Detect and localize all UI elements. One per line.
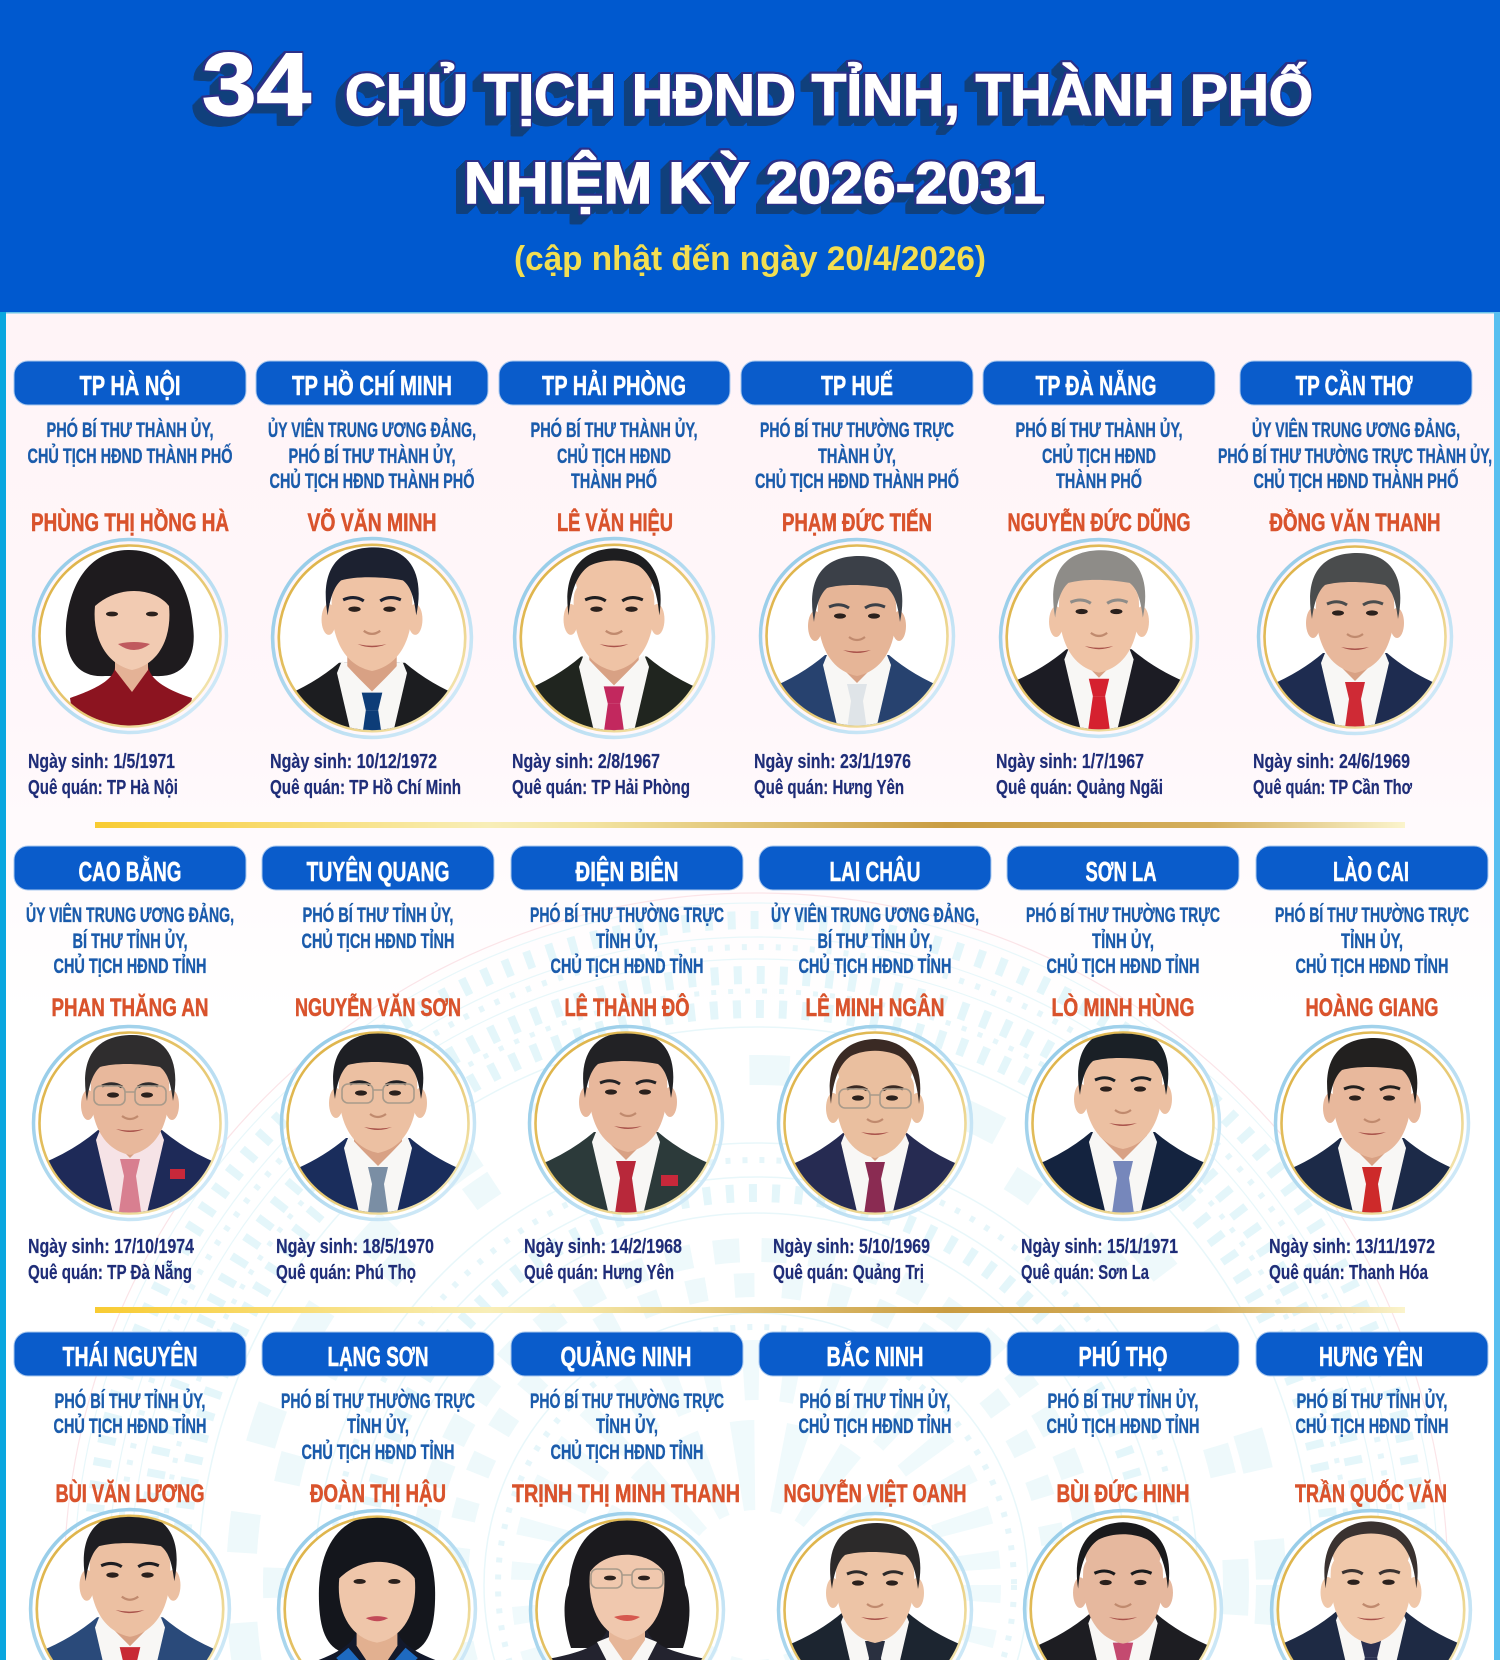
portrait <box>758 538 956 734</box>
name: ĐỒNG VĂN THANH <box>1270 507 1440 537</box>
role: THÀNH ỦY, <box>818 444 896 468</box>
name: VÕ VĂN MINH <box>308 507 436 537</box>
info: Ngày sinh: 2/8/1967 <box>512 751 660 773</box>
info <box>28 1236 195 1284</box>
right border <box>1494 312 1500 1660</box>
role <box>1296 1389 1448 1438</box>
name: HOÀNG GIANG <box>1306 993 1438 1022</box>
role <box>1046 1389 1200 1438</box>
info: Quê quán: Phú Thọ <box>276 1262 416 1284</box>
info <box>1269 1236 1435 1284</box>
card: TP Hồ Chí Minh <box>243 361 501 799</box>
role: CHỦ TỊCH HĐND THÀNH PHỐ <box>755 469 959 493</box>
role: PHÓ BÍ THƯ THÀNH ỦY, <box>530 418 698 442</box>
heading: TP Cần Thơ: TP CẦN THƠ <box>1296 370 1413 401</box>
role: ỦY VIÊN TRUNG ƯƠNG ĐẢNG, <box>268 418 476 442</box>
name: BÙI ĐỨC HINH <box>1056 1478 1190 1508</box>
role: TỈNH ỦY, <box>596 929 658 953</box>
card: Thái Nguyên <box>1 1332 259 1660</box>
info: Quê quán: TP Cần Thơ <box>1253 777 1413 799</box>
role: PHÓ BÍ THƯ THÀNH ỦY, <box>288 444 456 468</box>
name: NGUYỄN VĂN SƠN <box>295 992 461 1022</box>
info: Quê quán: Hưng Yên <box>524 1262 674 1284</box>
heading: Lào Cai: LÀO CAI <box>1333 856 1409 887</box>
divider 1 <box>95 822 1405 828</box>
info <box>276 1236 434 1284</box>
portrait <box>32 1024 228 1222</box>
role: ỦY VIÊN TRUNG ƯƠNG ĐẢNG, <box>26 903 234 927</box>
name: TRỊNH THỊ MINH THANH <box>512 1480 740 1508</box>
portrait <box>279 1511 475 1660</box>
role <box>530 418 698 493</box>
info: Quê quán: TP Đà Nẵng <box>28 1260 192 1284</box>
role <box>771 903 979 978</box>
card: Tuyên Quang <box>253 846 503 1284</box>
heading: TP Hà Nội: TP HÀ NỘI <box>80 369 180 401</box>
title: CHỦ TỊCH HĐND TỈNH, THÀNH PHỐ <box>345 63 1313 128</box>
card: Lạng Sơn <box>262 1332 494 1660</box>
divider 2 <box>95 1307 1405 1313</box>
card: Quảng Ninh <box>511 1332 743 1660</box>
background pattern: bronze drum <box>64 893 1448 1660</box>
card: Lai Châu <box>750 846 1000 1284</box>
role: PHÓ BÍ THƯ TỈNH ỦY, <box>1048 1389 1198 1413</box>
role <box>1275 903 1469 978</box>
role: CHỦ TỊCH HĐND TỈNH <box>798 1414 952 1438</box>
title: NHIỆM KỲ 2026-2031 <box>464 151 1045 216</box>
role: CHỦ TỊCH HĐND THÀNH PHỐ <box>270 469 474 493</box>
role <box>302 903 454 953</box>
role: CHỦ TỊCH HĐND TỈNH <box>302 1440 454 1464</box>
info: Quê quán: Sơn La <box>1021 1262 1150 1284</box>
info: Ngày sinh: 13/11/1972 <box>1269 1236 1435 1258</box>
name: LÒ MINH HÙNG <box>1052 992 1194 1022</box>
name: TRẦN QUỐC VĂN <box>1295 1478 1447 1508</box>
info: Quê quán: TP Hồ Chí Minh <box>270 777 461 799</box>
heading: Cao Bằng: CAO BẰNG <box>78 856 182 887</box>
info: Ngày sinh: 15/1/1971 <box>1021 1236 1178 1258</box>
heading: TP Đà Nẵng: TP ĐÀ NẴNG <box>1036 369 1156 401</box>
card: Lào Cai <box>1247 846 1497 1284</box>
role: CHỦ TỊCH HĐND TỈNH <box>1046 1414 1200 1438</box>
info: Ngày sinh: 23/1/1976 <box>754 751 911 773</box>
info <box>996 751 1163 799</box>
role: PHÓ BÍ THƯ TỈNH ỦY, <box>54 1389 206 1413</box>
info <box>754 751 911 799</box>
card: TP Hà Nội <box>14 361 246 799</box>
role <box>26 903 234 978</box>
portrait <box>776 1512 974 1660</box>
role: CHỦ TỊCH HĐND TỈNH <box>54 1414 206 1438</box>
heading: Sơn La: SƠN LA <box>1086 856 1156 887</box>
role <box>1218 418 1492 493</box>
heading: TP Hải Phòng: TP HẢI PHÒNG <box>542 369 686 401</box>
role <box>54 1389 206 1438</box>
name: LÊ MINH NGÂN <box>806 992 944 1022</box>
portrait <box>270 536 474 740</box>
role: PHÓ BÍ THƯ THƯỜNG TRỰC <box>530 903 724 927</box>
info <box>1021 1236 1178 1284</box>
role: PHÓ BÍ THƯ THƯỜNG TRỰC <box>760 418 954 442</box>
role: TỈNH ỦY, <box>1341 929 1403 953</box>
role <box>1016 418 1182 493</box>
info: Quê quán: TP Hà Nội <box>28 777 178 799</box>
heading: Lạng Sơn: LẠNG SƠN <box>328 1341 428 1372</box>
heading: Lai Châu: LAI CHÂU <box>830 856 920 887</box>
info <box>28 751 178 799</box>
role <box>28 418 232 468</box>
role: CHỦ TỊCH HĐND TỈNH <box>54 954 206 978</box>
title: 34 <box>202 34 312 134</box>
role: PHÓ BÍ THƯ TỈNH ỦY, <box>302 903 454 927</box>
portrait <box>1024 1024 1222 1222</box>
role: CHỦ TỊCH HĐND TỈNH <box>1046 954 1200 978</box>
portrait <box>1270 1508 1472 1660</box>
top edge line <box>6 312 1494 314</box>
role: PHÓ BÍ THƯ THƯỜNG TRỰC <box>281 1389 475 1413</box>
info: Ngày sinh: 18/5/1970 <box>276 1236 434 1258</box>
role <box>281 1389 475 1464</box>
name: LÊ THÀNH ĐÔ <box>564 992 690 1022</box>
role <box>530 1389 724 1464</box>
portrait <box>512 536 716 740</box>
role: CHỦ TỊCH HĐND TỈNH <box>550 1440 704 1464</box>
heading: Bắc Ninh: BẮC NINH <box>826 1341 924 1372</box>
info <box>524 1236 682 1284</box>
heading: Tuyên Quang: TUYÊN QUANG <box>306 856 450 887</box>
portrait <box>998 538 1200 738</box>
portrait <box>1256 538 1454 736</box>
heading: Phú Thọ: PHÚ THỌ <box>1078 1341 1168 1372</box>
role: TỈNH ỦY, <box>347 1414 409 1438</box>
info: Ngày sinh: 14/2/1968 <box>524 1236 682 1258</box>
name: PHAN THĂNG AN <box>52 993 208 1022</box>
info: Quê quán: Quảng Trị <box>773 1262 924 1284</box>
role: CHỦ TỊCH HĐND TỈNH <box>550 954 704 978</box>
role: ỦY VIÊN TRUNG ƯƠNG ĐẢNG, <box>771 903 979 927</box>
role <box>530 903 724 978</box>
info: Ngày sinh: 5/10/1969 <box>773 1236 930 1258</box>
info: Ngày sinh: 17/10/1974 <box>28 1236 195 1258</box>
name: NGUYỄN ĐỨC DŨNG <box>1008 507 1190 537</box>
name: PHÙNG THỊ HỒNG HÀ <box>31 507 229 537</box>
role: PHÓ BÍ THƯ THÀNH ỦY, <box>46 418 214 442</box>
name: NGUYỄN VIỆT OANH <box>784 1478 966 1508</box>
portrait <box>34 540 226 732</box>
name: ĐOÀN THỊ HẬU <box>310 1478 446 1508</box>
portrait <box>1274 1024 1470 1222</box>
info: Ngày sinh: 10/12/1972 <box>270 751 437 773</box>
info <box>773 1236 930 1284</box>
card: TP Hải Phòng <box>485 361 743 799</box>
name: LÊ VĂN HIỆU <box>557 507 673 537</box>
info: Ngày sinh: 1/5/1971 <box>28 751 175 773</box>
card: Hưng Yên <box>1242 1332 1500 1660</box>
heading: Hưng Yên: HƯNG YÊN <box>1319 1341 1423 1372</box>
role <box>755 418 959 493</box>
info: Ngày sinh: 24/6/1969 <box>1253 751 1410 773</box>
role: THÀNH PHỐ <box>571 469 657 493</box>
role: THÀNH PHỐ <box>1056 469 1142 493</box>
card: TP Huế <box>732 361 982 799</box>
info <box>1253 751 1413 799</box>
portrait <box>280 1024 476 1222</box>
info: Quê quán: Quảng Ngãi <box>996 777 1163 799</box>
left border <box>0 312 6 1660</box>
heading: Thái Nguyên: THÁI NGUYÊN <box>62 1341 198 1372</box>
heading: TP Huế: TP HUẾ <box>821 370 893 401</box>
info: Quê quán: Hưng Yên <box>754 777 904 799</box>
portrait <box>528 1024 724 1222</box>
role <box>268 418 476 493</box>
subtitle: (cập nhật đến ngày 20/4/2026) <box>514 240 986 278</box>
role: CHỦ TỊCH HĐND THÀNH PHỐ <box>28 444 232 468</box>
card: Bắc Ninh <box>750 1332 1000 1660</box>
portrait <box>28 1508 232 1660</box>
card: Sơn La <box>998 846 1248 1284</box>
portrait <box>530 1514 724 1660</box>
header band <box>0 0 1500 312</box>
role: PHÓ BÍ THƯ THƯỜNG TRỰC <box>530 1389 724 1413</box>
title <box>202 34 1313 216</box>
role: PHÓ BÍ THƯ THƯỜNG TRỰC <box>1026 903 1220 927</box>
portrait <box>1022 1508 1224 1660</box>
info: Quê quán: TP Hải Phòng <box>512 777 690 799</box>
info <box>270 751 461 799</box>
portrait <box>776 1024 974 1222</box>
role: BÍ THƯ TỈNH ỦY, <box>72 929 188 953</box>
card: Phú Thọ <box>996 1332 1250 1660</box>
role <box>1026 903 1220 978</box>
heading: Điện Biên: ĐIỆN BIÊN <box>576 856 678 887</box>
role: PHÓ BÍ THƯ THÀNH ỦY, <box>1016 418 1182 442</box>
role <box>798 1389 952 1438</box>
card: TP Đà Nẵng <box>972 361 1226 799</box>
role: CHỦ TỊCH HĐND TỈNH <box>302 929 454 953</box>
info: Quê quán: Thanh Hóa <box>1269 1262 1429 1284</box>
info <box>512 751 690 799</box>
role: TỈNH ỦY, <box>596 1414 658 1438</box>
role: PHÓ BÍ THƯ TỈNH ỦY, <box>800 1389 950 1413</box>
card: Cao Bằng <box>5 846 255 1284</box>
name: PHẠM ĐỨC TIẾN <box>782 507 932 537</box>
role: CHỦ TỊCH HĐND TỈNH <box>798 954 952 978</box>
role: BÍ THƯ TỈNH ỦY, <box>818 929 932 953</box>
heading: Quảng Ninh: QUẢNG NINH <box>560 1340 692 1372</box>
card: TP Cần Thơ <box>1218 361 1492 799</box>
role: CHỦ TỊCH HĐND <box>1042 444 1156 468</box>
card: Điện Biên <box>501 846 751 1284</box>
heading: TP Hồ Chí Minh: TP HỒ CHÍ MINH <box>292 370 452 401</box>
name: BÙI VĂN LƯƠNG <box>56 1478 204 1508</box>
info: Ngày sinh: 1/7/1967 <box>996 751 1144 773</box>
role: TỈNH ỦY, <box>1092 929 1154 953</box>
role: CHỦ TỊCH HĐND <box>557 444 671 468</box>
